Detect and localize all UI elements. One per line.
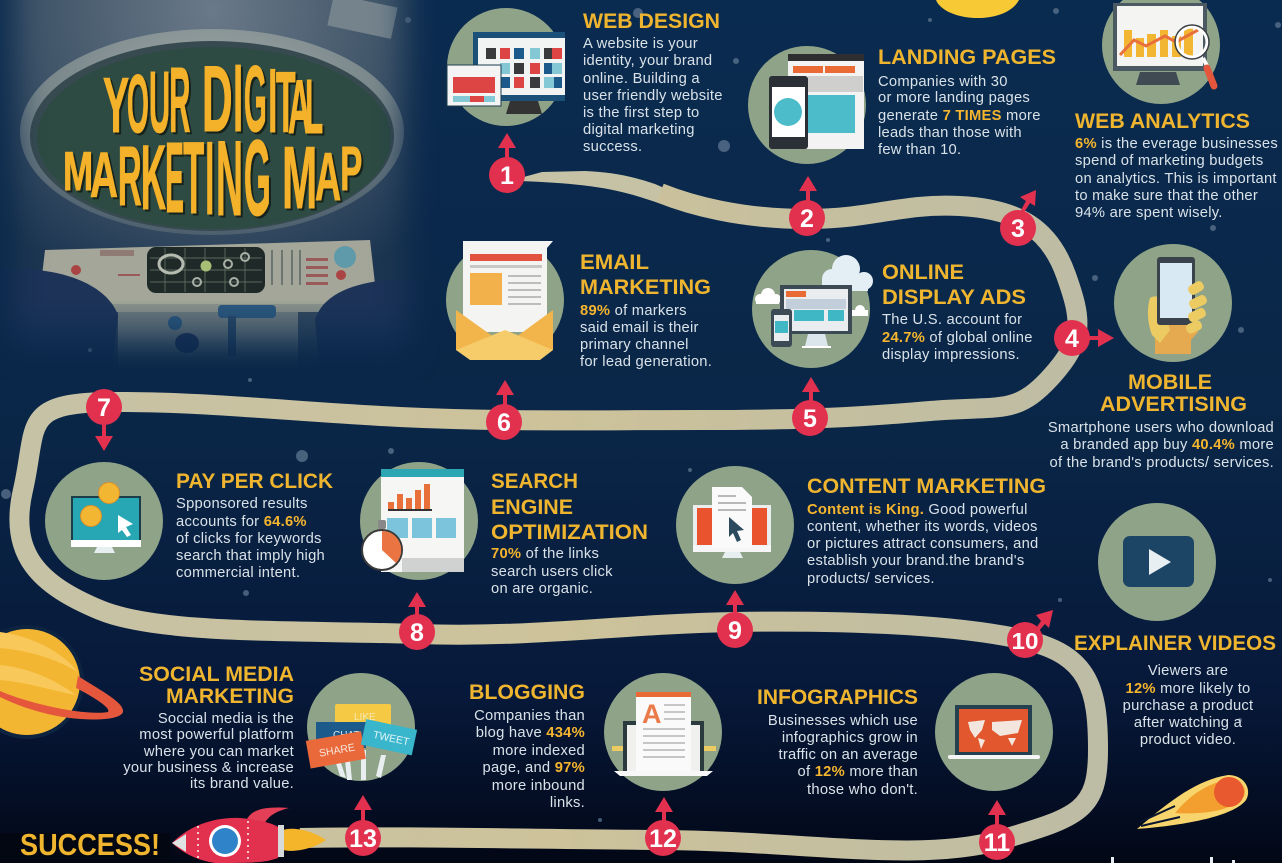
number 5: 5 [803, 405, 817, 433]
heading: social media marketing: MARKETING [166, 685, 294, 708]
arrow 12 [655, 797, 673, 825]
number 6: 6 [497, 409, 511, 437]
number 13 [345, 820, 381, 856]
text: blogging: more indexed [493, 743, 585, 759]
number 4 [1054, 320, 1090, 356]
arrow 7 [95, 422, 113, 451]
text: explainer videos: 12% more likely to [1125, 681, 1251, 697]
planet [0, 625, 123, 739]
title: T [276, 56, 296, 151]
number 12: 12 [649, 825, 677, 853]
title: U [149, 55, 170, 151]
title: K [141, 126, 166, 230]
radar screen [147, 247, 265, 293]
icon: analytics monitor [1102, 0, 1220, 104]
text: infographics: Businesses which use [768, 713, 918, 729]
number 3: 3 [1011, 215, 1025, 243]
number 9 [717, 612, 753, 648]
title: G [244, 47, 267, 152]
heading: pay per click: PAY PER CLICK [176, 470, 333, 493]
icon: report and stopwatch [360, 462, 478, 580]
title: A [288, 66, 311, 150]
icon: content monitor and document [676, 466, 794, 584]
heading: web design: WEB DESIGN [583, 10, 720, 33]
text: email marketing: said email is their [580, 320, 699, 336]
title: I [205, 121, 214, 237]
text: social media marketing: its brand value. [190, 776, 294, 792]
text: content marketing: Content is King. Good powerful [807, 502, 1028, 518]
heading: social media marketing [139, 663, 294, 708]
cockpit illustration [0, 0, 440, 380]
heading: email marketing [580, 251, 711, 299]
text: explainer videos: after watching a [1134, 715, 1243, 731]
heading: infographics: INFOGRAPHICS [757, 686, 918, 709]
title: E [165, 123, 184, 234]
rocket [172, 808, 326, 863]
heading: landing pages: LANDING PAGES [878, 46, 1056, 69]
number 11: 11 [984, 829, 1010, 857]
icon: landing page and phone [748, 46, 866, 164]
number 10: 10 [1012, 628, 1038, 654]
heading: explainer videos: EXPLAINER VIDEOS [1074, 632, 1276, 655]
text: web design: user friendly website [583, 88, 723, 104]
number 13: 13 [349, 825, 377, 853]
number 1: 1 [500, 162, 514, 190]
heading: mobile advertising [1100, 371, 1247, 416]
arrow 13 [354, 795, 372, 823]
title: M [63, 141, 93, 203]
step 13: social media marketing [123, 663, 417, 856]
title: R [169, 49, 190, 153]
text: landing pages: Companies with 30 [878, 74, 1008, 90]
text: online display ads: The U.S. account for [882, 312, 1022, 328]
icon: blog article on laptop [604, 673, 722, 791]
icon: social media signs [306, 673, 417, 781]
title: N [216, 118, 243, 238]
text: search engine optimization: on are organic. [491, 581, 593, 597]
arrow 3 [1020, 190, 1036, 214]
icon: social media signs: SHARE [318, 742, 356, 760]
text: web design: is the first step to [583, 105, 700, 121]
text: web analytics: on analytics. This is important [1075, 171, 1277, 187]
comet [1137, 775, 1248, 829]
arrow 5 [802, 377, 820, 405]
text: landing pages: generate 7 TIMES more [878, 108, 1041, 124]
control panel details [71, 246, 356, 285]
heading: search engine optimization: OPTIMIZATION [491, 521, 648, 544]
text: web design: digital marketing [583, 122, 695, 138]
heading: online display ads: DISPLAY ADS [882, 286, 1026, 309]
icon: pay per click monitor [45, 462, 163, 580]
bottom strip [0, 833, 170, 863]
step 3: web analytics [1000, 0, 1278, 246]
text: blogging: Companies than [474, 708, 585, 724]
number 2 [789, 200, 825, 236]
sun [936, 0, 1019, 18]
icon: hand holding phone [1114, 244, 1232, 362]
text: online display ads: display impressions. [882, 347, 1020, 363]
text: pay per click: accounts for 64.6% [176, 514, 307, 530]
text: infographics: of 12% more than [798, 764, 918, 780]
number 7: 7 [97, 394, 111, 422]
icon: video player [1098, 503, 1216, 621]
number 8 [399, 614, 435, 650]
text: blogging: blog have 434% [476, 725, 585, 741]
heading: blogging: BLOGGING [469, 681, 585, 704]
text: blogging: links. [550, 795, 585, 811]
step 5: online display ads [752, 250, 1033, 436]
text: pay per click: commercial intent. [176, 565, 300, 581]
arrow 1 [498, 133, 516, 162]
text: mobile advertising: of the brand's products/ services. [1050, 455, 1274, 471]
number 10 [1007, 622, 1043, 658]
step 11: infographics [757, 673, 1053, 860]
text: infographics: infographics grow in [782, 730, 918, 746]
number 4: 4 [1065, 325, 1079, 353]
text: web design: online. Building a [583, 71, 700, 87]
text: web analytics: 6% is the everage businesses [1075, 136, 1278, 152]
heading: social media marketing: SOCIAL MEDIA [139, 663, 294, 686]
title: L [305, 63, 323, 150]
heading: search engine optimization: SEARCH [491, 470, 578, 493]
step 9: content marketing [676, 466, 1046, 648]
title: D [202, 47, 233, 152]
text: landing pages: or more landing pages [878, 90, 1030, 106]
text: web analytics: spend of marketing budgets [1075, 153, 1264, 169]
icon: social media signs: CHAT [333, 730, 359, 741]
number 5 [792, 400, 828, 436]
heading: mobile advertising: MOBILE [1128, 371, 1212, 394]
step 1: web design [447, 8, 723, 193]
title: Y [103, 61, 129, 149]
title: I [268, 49, 277, 151]
text: web design: success. [583, 139, 642, 155]
title: I [233, 45, 243, 152]
icon: email newsletter envelope [446, 241, 564, 360]
text: pay per click: search that imply high [176, 548, 325, 564]
icon: display ads devices [752, 250, 873, 368]
text: web design: identity, your brand [583, 53, 712, 69]
text: social media marketing: Soccial media is the [158, 711, 294, 727]
icon: social media signs: TWEET [372, 729, 411, 748]
step 2: landing pages [748, 46, 1056, 236]
title [63, 45, 362, 238]
text: pay per click: of clicks for keywords [176, 531, 322, 547]
heading: search engine optimization: ENGINE [491, 496, 573, 519]
title: A [90, 139, 118, 211]
text: landing pages: leads than those with [878, 125, 1022, 141]
heading: online display ads: ONLINE [882, 261, 964, 284]
heading: email marketing: MARKETING [580, 276, 711, 299]
text: explainer videos: purchase a product [1123, 698, 1253, 714]
icon: web design monitor [447, 8, 565, 126]
title: P [340, 135, 362, 204]
text: social media marketing: most powerful platform [139, 727, 294, 743]
number 9: 9 [728, 617, 742, 645]
step 8: search engine optimization [360, 462, 648, 650]
heading: web analytics: WEB ANALYTICS [1075, 110, 1250, 133]
text: infographics: traffic on an average [779, 747, 918, 763]
cropped logo fragment [1111, 857, 1235, 863]
seats [30, 270, 118, 342]
step 12: blogging [469, 673, 722, 856]
icon: blog article on laptop: A [642, 699, 662, 729]
arrow 6 [496, 380, 514, 409]
text: content marketing: content, whether its words, videos [807, 519, 1038, 535]
title: A [315, 139, 341, 215]
text: web analytics: 94% are spent wisely. [1075, 205, 1223, 221]
text: search engine optimization: search users click [491, 564, 613, 580]
text: blogging: page, and 97% [482, 760, 585, 776]
text: online display ads: 24.7% of global online [882, 330, 1033, 346]
text: explainer videos: Viewers are [1148, 663, 1228, 679]
step 7: pay per click [45, 389, 333, 581]
title: O [127, 57, 149, 150]
heading: online display ads [882, 261, 1026, 309]
title: M [282, 129, 317, 227]
text: content marketing: products/ services. [807, 571, 935, 587]
text: web analytics: to make sure that the other [1075, 188, 1258, 204]
text: email marketing: 89% of markers [580, 303, 687, 319]
text: social media marketing: where you can market [143, 744, 294, 760]
road path [19, 171, 1098, 850]
heading: content marketing: CONTENT MARKETING [807, 475, 1046, 498]
title: R [118, 129, 142, 223]
text: web design: A website is your [583, 36, 698, 52]
step 10: explainer videos [1007, 503, 1276, 748]
arrow 9 [726, 590, 744, 618]
arrow 2 [799, 176, 817, 205]
heading: mobile advertising: ADVERTISING [1100, 393, 1247, 416]
icon: laptop with world map [935, 673, 1053, 791]
arrow 8 [408, 592, 426, 619]
text: email marketing: primary channel [580, 337, 689, 353]
title: T [183, 120, 204, 235]
text: content marketing: or pictures attract consumers, and [807, 536, 1038, 552]
step 4: mobile advertising [1048, 244, 1274, 471]
arrow 11 [988, 800, 1006, 829]
number 8: 8 [410, 619, 424, 647]
text: mobile advertising: a branded app buy 40.4% more [1060, 437, 1274, 453]
icon: social media signs: LIKE [354, 712, 376, 723]
arrow 10 [1034, 610, 1053, 633]
number 6 [486, 404, 522, 440]
text: mobile advertising: Smartphone users who download [1048, 420, 1274, 436]
number 2: 2 [800, 205, 814, 233]
heading: email marketing: EMAIL [580, 251, 649, 274]
text: email marketing: for lead generation. [580, 354, 712, 370]
title: G [244, 117, 271, 238]
step 6: email marketing [446, 241, 712, 440]
text: pay per click: Spponsored results [176, 496, 308, 512]
number 12 [645, 820, 681, 856]
text: explainer videos: product video. [1140, 732, 1236, 748]
heading: search engine optimization [491, 470, 648, 544]
success label: SUCCESS! [20, 827, 160, 862]
text: infographics: those who don't. [807, 782, 918, 798]
text: blogging: more inbound [492, 778, 585, 794]
number 3 [1000, 210, 1036, 246]
number 1 [489, 157, 525, 193]
text: landing pages: few than 10. [878, 142, 961, 158]
number 7 [86, 389, 122, 425]
text: social media marketing: your business & increase [123, 760, 294, 776]
number 11 [979, 824, 1015, 860]
text: content marketing: establish your brand.the brand's [807, 553, 1024, 569]
arrow 4 [1085, 329, 1114, 347]
joystick [168, 305, 276, 356]
text: search engine optimization: 70% of the links [491, 546, 599, 562]
